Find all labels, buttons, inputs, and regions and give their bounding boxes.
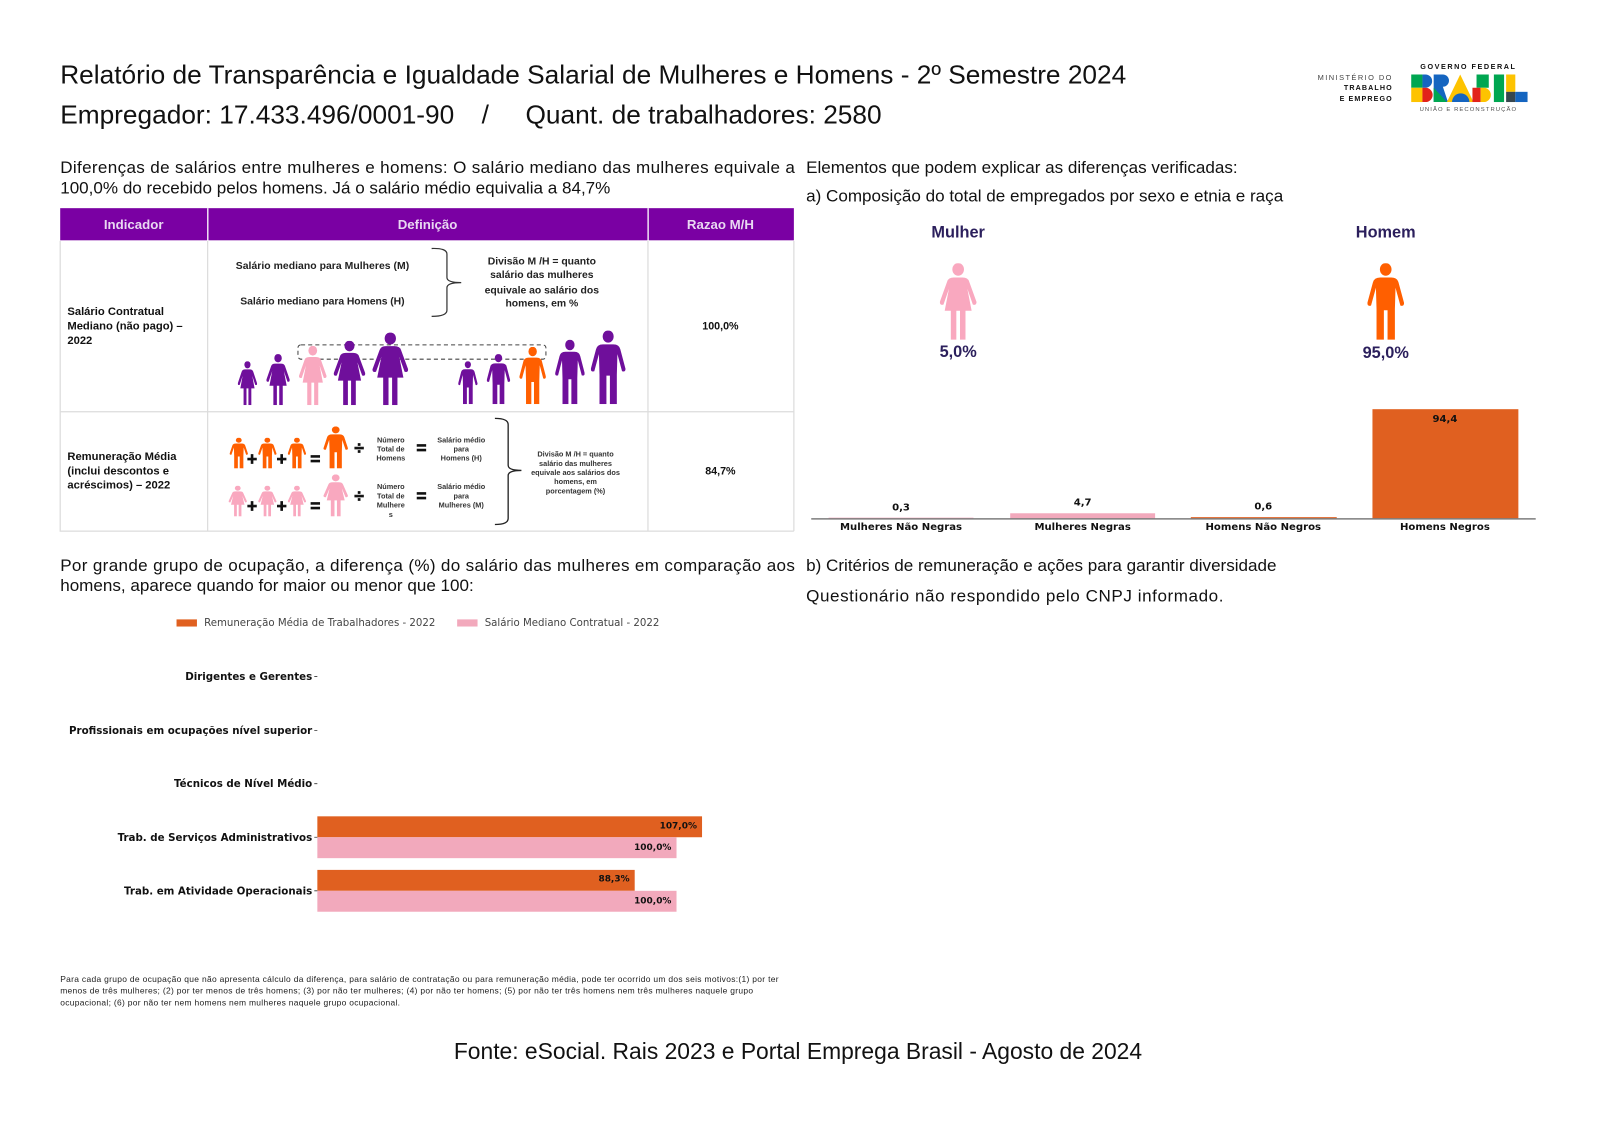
bar chart: sex and race composition: 94,4 — [1432, 414, 1457, 425]
table header — [60, 208, 794, 241]
pictogram: Homem 95,0% — [1356, 224, 1416, 362]
equation: women: + — [277, 496, 287, 516]
bar chart: pay ratio by occupation: 100,0% — [634, 897, 671, 907]
intro text: wage differences: Diferenças de salários entre mulheres e homens: O salário mediano das mulheres equivale a — [60, 158, 795, 177]
row: Salário Contratual Mediano: Salário Contratual — [67, 306, 164, 318]
pictogram: Mulher 5,0%: Mulher — [931, 224, 986, 242]
equation: men: Salário médio — [437, 435, 486, 444]
legend: Salário Mediano Contratual - 2022 — [485, 617, 659, 629]
footnote — [60, 974, 779, 1008]
legend — [177, 617, 659, 629]
text: occupation group intro: homens, aparece quando for maior ou menor que 100: — [60, 576, 474, 595]
equation: men: Número — [377, 435, 405, 444]
footnote: Para cada grupo de ocupação que não apresenta cálculo da diferença, para salário de contratação ou para remuneração média, pode ter ocorrido um dos seis motivos:(1) por ter — [60, 974, 779, 984]
title: Relatório de Transparência e Igualdade Salarial de Mulheres e Homens - 2º Semestre 2024 — [60, 59, 1126, 89]
row: Salário Contratual Mediano: salário das mulheres — [490, 270, 594, 281]
row: Salário Contratual Mediano: Salário mediano para Homens (H) — [240, 297, 405, 308]
row: Remuneração Média: (inclui descontos e — [67, 465, 169, 477]
pictogram: Homem 95,0%: Homem — [1356, 224, 1416, 242]
row: Salário Contratual Mediano: Divisão M /H = quanto — [488, 257, 596, 268]
bar chart: sex and race composition: Mulheres Não Negras — [840, 522, 962, 533]
equation: men: para — [453, 444, 470, 453]
bar chart: sex and race composition: 0,3 — [892, 503, 910, 514]
pictogram: Mulher 5,0%: 5,0% — [940, 343, 977, 361]
bar chart: pay ratio by occupation: 107,0% — [660, 822, 697, 832]
table header: Definição — [398, 217, 457, 232]
text: occupation group intro: Por grande grupo de ocupação, a diferença (%) do salário das mulheres em comparação aos — [60, 556, 795, 575]
row: Remuneração Média: Divisão M /H = quanto — [537, 450, 614, 459]
pictogram: Homem 95,0%: 95,0% — [1363, 344, 1409, 362]
table header: Razao M/H — [687, 217, 754, 232]
row: Remuneração Média: salário das mulheres — [539, 459, 612, 468]
footnote: ocupacional; (6) por não ter nem homens nem mulheres naquele grupo ocupacional. — [60, 998, 400, 1008]
row: Remuneração Média: acréscimos) – 2022 — [67, 480, 170, 492]
icons: men — [458, 330, 626, 404]
pictogram: Mulher 5,0% — [931, 224, 986, 361]
equation: men: = — [310, 449, 320, 469]
equation: women — [229, 474, 486, 519]
bar chart: sex and race composition: Homens Não Negros — [1205, 522, 1321, 533]
bar chart: pay ratio by occupation: 100,0% — [634, 843, 671, 853]
title: Empregador: 17.433.496/0001-90 — [60, 99, 454, 129]
bar chart: pay ratio by occupation: 88,3% — [598, 875, 630, 885]
heading: explanatory elements — [806, 158, 1284, 205]
heading: explanatory elements: Elementos que podem explicar as diferenças verificadas: — [806, 158, 1238, 177]
logo: Ministério do Trabalho e Emprego / Governo Federal: MINISTÉRIO DO — [1318, 73, 1393, 82]
row: Salário Contratual Mediano: Salário mediano para Mulheres (M) — [236, 261, 409, 272]
equation: women: Salário médio — [437, 482, 486, 491]
heading: explanatory elements: a) Composição do total de empregados por sexo e etnia e raça — [806, 186, 1284, 205]
equation: women: Total de — [377, 491, 405, 500]
row: Remuneração Média: homens, em — [554, 477, 597, 486]
row: Remuneração Média — [67, 418, 736, 524]
row: Remuneração Média: equivale aos salários dos — [531, 468, 620, 477]
equation: women: para — [453, 491, 470, 500]
bar chart: sex and race composition: 4,7 — [1074, 498, 1092, 509]
equation: men: + — [277, 449, 287, 469]
row: Remuneração Média: Remuneração Média — [67, 451, 177, 463]
bar chart: sex and race composition: Mulheres Negras — [1034, 522, 1131, 533]
equation: men: Homens — [376, 454, 405, 463]
equation: men: Homens (H) — [441, 454, 482, 463]
row: Salário Contratual Mediano: equivale ao salário dos — [485, 285, 599, 296]
median highlight box — [298, 345, 546, 359]
text: criteria section: Questionário não respondido pelo CNPJ informado. — [806, 586, 1223, 605]
row: Salário Contratual Mediano — [67, 248, 739, 405]
logo: Ministério do Trabalho e Emprego / Governo Federal: E EMPREGO — [1340, 95, 1393, 103]
equation: women: Mulheres (M) — [439, 501, 484, 510]
equation: women: Número — [377, 482, 405, 491]
text: criteria section: b) Critérios de remuneração e ações para garantir diversidade — [806, 556, 1277, 575]
intro text: wage differences: 100,0% do recebido pelos homens. Já o salário médio equivalia a 84,7% — [60, 178, 610, 197]
row: Remuneração Média: porcentagem (%) — [546, 486, 606, 495]
bar chart: sex and race composition: Homens Negros — [1400, 522, 1490, 533]
equation: women: = — [310, 496, 320, 516]
icons: women — [238, 332, 408, 405]
text: occupation group intro — [60, 556, 795, 595]
legend: Remuneração Média de Trabalhadores - 2022 — [204, 617, 435, 629]
title — [60, 59, 1126, 129]
row: Salário Contratual Mediano: 100,0% — [702, 321, 739, 333]
equation: women: Mulhere — [377, 501, 405, 510]
footnote: menos de três mulheres; (2) por ter menos de três homens; (3) por não ter mulheres; (4) por não ter homens; (5) por não ter três homens nem três mulheres naquele grupo — [60, 985, 753, 995]
logo: Ministério do Trabalho e Emprego / Governo Federal — [1318, 62, 1528, 113]
row: Remuneração Média: 84,7% — [705, 465, 736, 477]
logo: Ministério do Trabalho e Emprego / Governo Federal: TRABALHO — [1344, 84, 1393, 92]
bar chart: pay ratio by occupation: Técnicos de Nível Médio — [174, 778, 312, 790]
row: Salário Contratual Mediano: 2022 — [67, 335, 92, 347]
bar chart: sex and race composition: 0,6 — [1254, 502, 1272, 513]
title: / — [482, 99, 490, 129]
bar chart: pay ratio by occupation: Trab. em Atividade Operacionais — [124, 885, 312, 897]
equation: women: s — [389, 510, 393, 519]
source: Fonte: eSocial. Rais 2023 e Portal Emprega Brasil - Agosto de 2024 — [454, 1038, 1142, 1064]
bar chart: pay ratio by occupation — [69, 671, 702, 912]
logo: Ministério do Trabalho e Emprego / Governo Federal: UNIÃO E RECONSTRUÇÃO — [1420, 106, 1517, 113]
bar chart: pay ratio by occupation: Trab. de Serviços Administrativos — [118, 832, 312, 844]
table header: Indicador — [104, 217, 163, 232]
bar chart: pay ratio by occupation: Profissionais em ocupações nível superior — [69, 725, 313, 737]
equation: women: ÷ — [354, 486, 364, 506]
equation: men: ÷ — [354, 438, 364, 458]
equation: men: Total de — [377, 444, 405, 453]
intro text: wage differences — [60, 158, 795, 197]
bar chart: sex and race composition — [811, 409, 1536, 533]
bar chart: pay ratio by occupation: Dirigentes e Gerentes — [185, 671, 312, 683]
text: criteria section — [806, 556, 1277, 605]
row: Salário Contratual Mediano: Mediano (não pago) – — [67, 321, 183, 333]
equation: men: = — [416, 438, 426, 458]
row: Salário Contratual Mediano: homens, em % — [505, 299, 578, 310]
equation: men: + — [247, 449, 257, 469]
table: indicators — [60, 208, 794, 531]
equation: women: + — [247, 496, 257, 516]
equation: men — [230, 426, 486, 469]
equation: women: = — [416, 486, 426, 506]
logo: Ministério do Trabalho e Emprego / Governo Federal: GOVERNO FEDERAL — [1420, 62, 1516, 71]
title: Quant. de trabalhadores: 2580 — [526, 99, 882, 129]
